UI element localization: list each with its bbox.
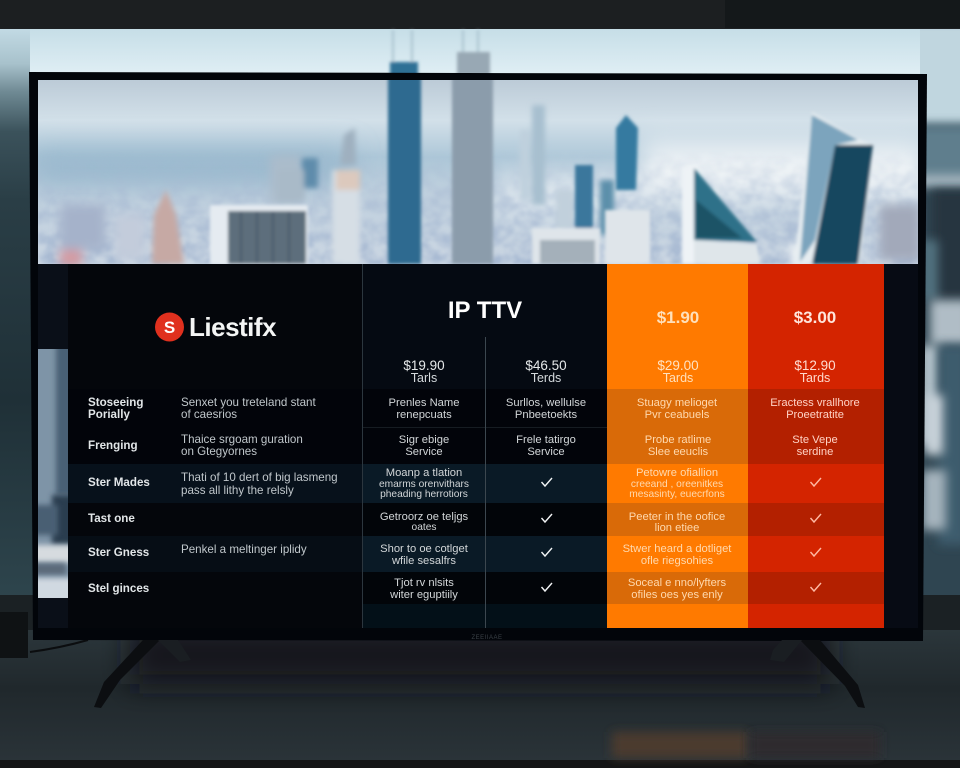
plan column 1 cells: witer eguptiily: [389, 589, 458, 601]
plan column 3 cells: creeand , oreenitkes: [631, 479, 723, 490]
plan column 1 cells: renepcuats: [396, 409, 452, 421]
plan column 4 cells: serdine: [797, 446, 833, 458]
price row: Tarls: [411, 371, 437, 385]
plan column 1 cells: [379, 397, 469, 601]
TV screen lower panel background: [38, 264, 68, 628]
brand logo: Liestifx: [189, 312, 277, 342]
skyline towers behind the TV top: [390, 30, 490, 76]
plan column 3 cells: Peeter in the oofice: [629, 511, 725, 523]
row descriptions: pass all lithy the relsly: [181, 484, 294, 497]
row descriptions: Penkel a meltinger iplidy: [181, 543, 307, 556]
plan column 3 cells: lion etiee: [655, 522, 699, 534]
plan column 4 cells: Eractess vrallhore: [770, 397, 860, 409]
row labels: Porially: [88, 408, 130, 421]
price row: $1.90: [657, 308, 699, 327]
plan column 1 cells: Prenles Name: [389, 397, 459, 409]
row labels: Ster Mades: [88, 476, 150, 489]
brand logo: S: [164, 318, 175, 337]
heading: IP TTV: [448, 297, 522, 324]
plan column 3 cells: [623, 397, 732, 601]
row descriptions: of caesrios: [181, 408, 237, 421]
price row: Terds: [531, 371, 561, 385]
TV brand label: ZEEIIAAE: [471, 635, 503, 641]
price row: $46.50: [525, 358, 567, 373]
plan column 4 cells: Proeetratite: [786, 409, 844, 421]
row descriptions: [181, 396, 338, 556]
price row: [403, 308, 836, 385]
row labels: Frenging: [88, 439, 138, 452]
price row: Tards: [663, 371, 693, 385]
plan column 3 cells: ofiles oes yes enly: [631, 589, 723, 601]
plan column 1 cells: Tjot rv nlsits: [394, 577, 454, 589]
plan column 3 cells: Stwer heard a dotliget: [623, 543, 732, 555]
plan column 2 cells: [506, 397, 586, 591]
plan column 1 cells: Getroorz oe teljgs: [380, 511, 469, 523]
plan column 3 cells: Petowre ofiallion: [636, 467, 718, 479]
TV stand legs: [94, 640, 865, 708]
row labels: [88, 396, 150, 595]
price row: $12.90: [794, 358, 836, 373]
plan column 4 cells: Ste Vepe: [792, 434, 838, 446]
plan column 1 cells: Sigr ebige: [399, 434, 449, 446]
row bands: [68, 389, 884, 628]
price row: $19.90: [403, 358, 445, 373]
plan column 1 cells: pheading herrotiors: [380, 489, 468, 500]
TV screen photo: city skyline: [30, 76, 930, 266]
plan column 2 cells: Service: [527, 446, 565, 458]
plan column 2 cells: Pnbeetoekts: [515, 409, 578, 421]
plan column 3 cells: mesasinty, euecrfons: [629, 489, 725, 500]
row labels: Stel ginces: [88, 582, 149, 595]
plan column 1 cells: emarms orenvithars: [379, 479, 469, 490]
row labels: Ster Gness: [88, 546, 149, 559]
row labels: Stoseeing: [88, 396, 143, 409]
plan column 2 cells: Surllos, wellulse: [506, 397, 586, 409]
plan column 1 cells: Shor to oe cotlget: [380, 543, 469, 555]
table column backgrounds: [68, 264, 918, 628]
plan column 1 cells: wfile sesalfrs: [391, 555, 456, 567]
TV frame: [29, 72, 927, 641]
row descriptions: Thati of 10 dert of big lasmeng: [181, 471, 338, 484]
plan column 4 cells: [770, 397, 860, 591]
plan column 1 cells: Service: [405, 446, 443, 458]
plan column 1 cells: Moanp a tlation: [386, 467, 462, 479]
plan column 3 cells: Pvr ceabuels: [645, 409, 710, 421]
row labels: Tast one: [88, 512, 135, 525]
plan column 3 cells: Slee eeuclis: [648, 446, 709, 458]
row descriptions: Thaice srgoam guration: [181, 433, 303, 446]
comparison table: [68, 264, 918, 628]
row descriptions: on Gtegyornes: [181, 445, 257, 458]
row descriptions: Senxet you treteland stant: [181, 396, 316, 409]
plan column 2 cells: Frele tatirgo: [516, 434, 576, 446]
plan column 1 cells: oates: [412, 522, 436, 533]
plan column 3 cells: Probe ratlime: [645, 434, 711, 446]
price row: Tards: [800, 371, 830, 385]
plan column 3 cells: Stuagy melioget: [637, 397, 718, 409]
price row: $29.00: [657, 358, 699, 373]
plan column 3 cells: Soceal e nno/lyfters: [628, 577, 727, 589]
price row: $3.00: [794, 308, 836, 327]
plan column 3 cells: ofle riegsohies: [641, 555, 713, 567]
